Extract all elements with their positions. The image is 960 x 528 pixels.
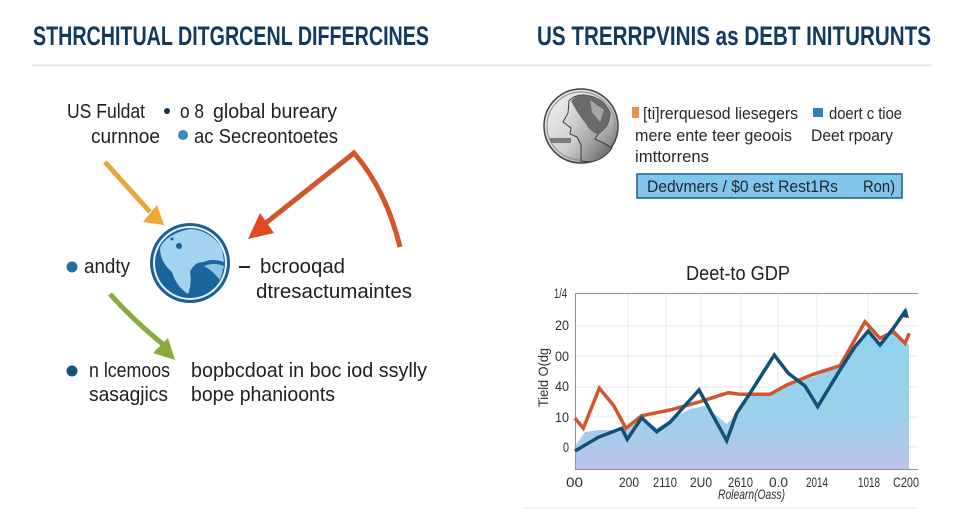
legend: orange item: [ti]rerquesod liesegers [643, 104, 798, 123]
line chart: debt to GDP [535, 285, 919, 502]
legend: blue item [811, 104, 902, 145]
legend: blue item: Deet rpoary [811, 126, 893, 145]
x axis labels: 2U0 [690, 474, 712, 490]
y axis labels: 1/4 [554, 285, 567, 301]
x axis labels: 200 [619, 474, 639, 490]
legend: blue item: doert c tioe [829, 104, 902, 123]
panel: structural differences diagram [66, 101, 427, 406]
arrow: red to globe [248, 153, 400, 247]
icon: coin [544, 89, 618, 163]
panel: treasuries [535, 89, 919, 502]
text block: bottom: bope phanioonts [191, 384, 335, 406]
x axis labels: 2014 [806, 474, 828, 490]
x axis labels: 00 [566, 474, 583, 490]
x axis labels: 2610 [728, 474, 753, 490]
x axis labels: 1018 [858, 474, 880, 490]
y axis labels: 10 [555, 409, 569, 425]
orange series [575, 322, 909, 428]
text block: top: US Fuldat [67, 101, 145, 123]
text block: bottom [66, 360, 427, 406]
x axis title: Rolearn(Oass) [718, 486, 785, 502]
heading divider [32, 64, 932, 66]
y axis labels: 00 [555, 348, 569, 364]
arrow: green down [110, 294, 175, 360]
callout box [637, 174, 902, 198]
axes [576, 294, 918, 470]
y axis labels: 0 [563, 439, 569, 455]
chart area fill [575, 328, 909, 469]
text block: left bullet: andty [84, 256, 130, 278]
y axis labels: 20 [555, 317, 569, 333]
text block: bottom: n lcemoos [89, 360, 170, 382]
legend: orange item [632, 104, 798, 166]
arrow: yellow to globe [105, 162, 164, 225]
left heading: STHRCHITUAL DITGRCENL DIFFERCINES [33, 21, 429, 51]
x axis labels: 0.0 [769, 474, 788, 490]
y axis labels [554, 285, 569, 455]
callout box: Ron) [863, 177, 895, 196]
text block: top: ac Secreontoetes [194, 126, 338, 148]
text block: top: curnnoe [91, 126, 160, 148]
legend: orange item: imttorrens [635, 147, 709, 166]
x axis labels: 2110 [653, 474, 677, 490]
y axis labels: 40 [555, 378, 569, 394]
y axis title: Tield O(dg [535, 348, 551, 407]
callout box: Dedvmers / $0 est Rest1Rs [647, 177, 838, 196]
icon: globe [150, 223, 230, 303]
text block: right of globe: bcrooqad [260, 256, 345, 278]
text block: top: global bureary [213, 101, 337, 123]
chart title: Deet-to GDP [686, 263, 790, 285]
text block: bottom: sasagjics [89, 384, 168, 406]
text block: right of globe: dtresactumaintes [256, 281, 412, 303]
text block: left bullet [66, 256, 130, 278]
text block: top [67, 101, 338, 148]
blue series [575, 310, 906, 451]
text block: right of globe [239, 256, 412, 303]
text block: top: o 8 [180, 101, 204, 123]
legend: orange item: mere ente teer geoois [635, 126, 792, 145]
text block: bottom: bopbcdoat in boc iod ssylly [191, 360, 427, 382]
x axis labels [566, 474, 919, 490]
x axis labels: C200 [893, 474, 919, 490]
